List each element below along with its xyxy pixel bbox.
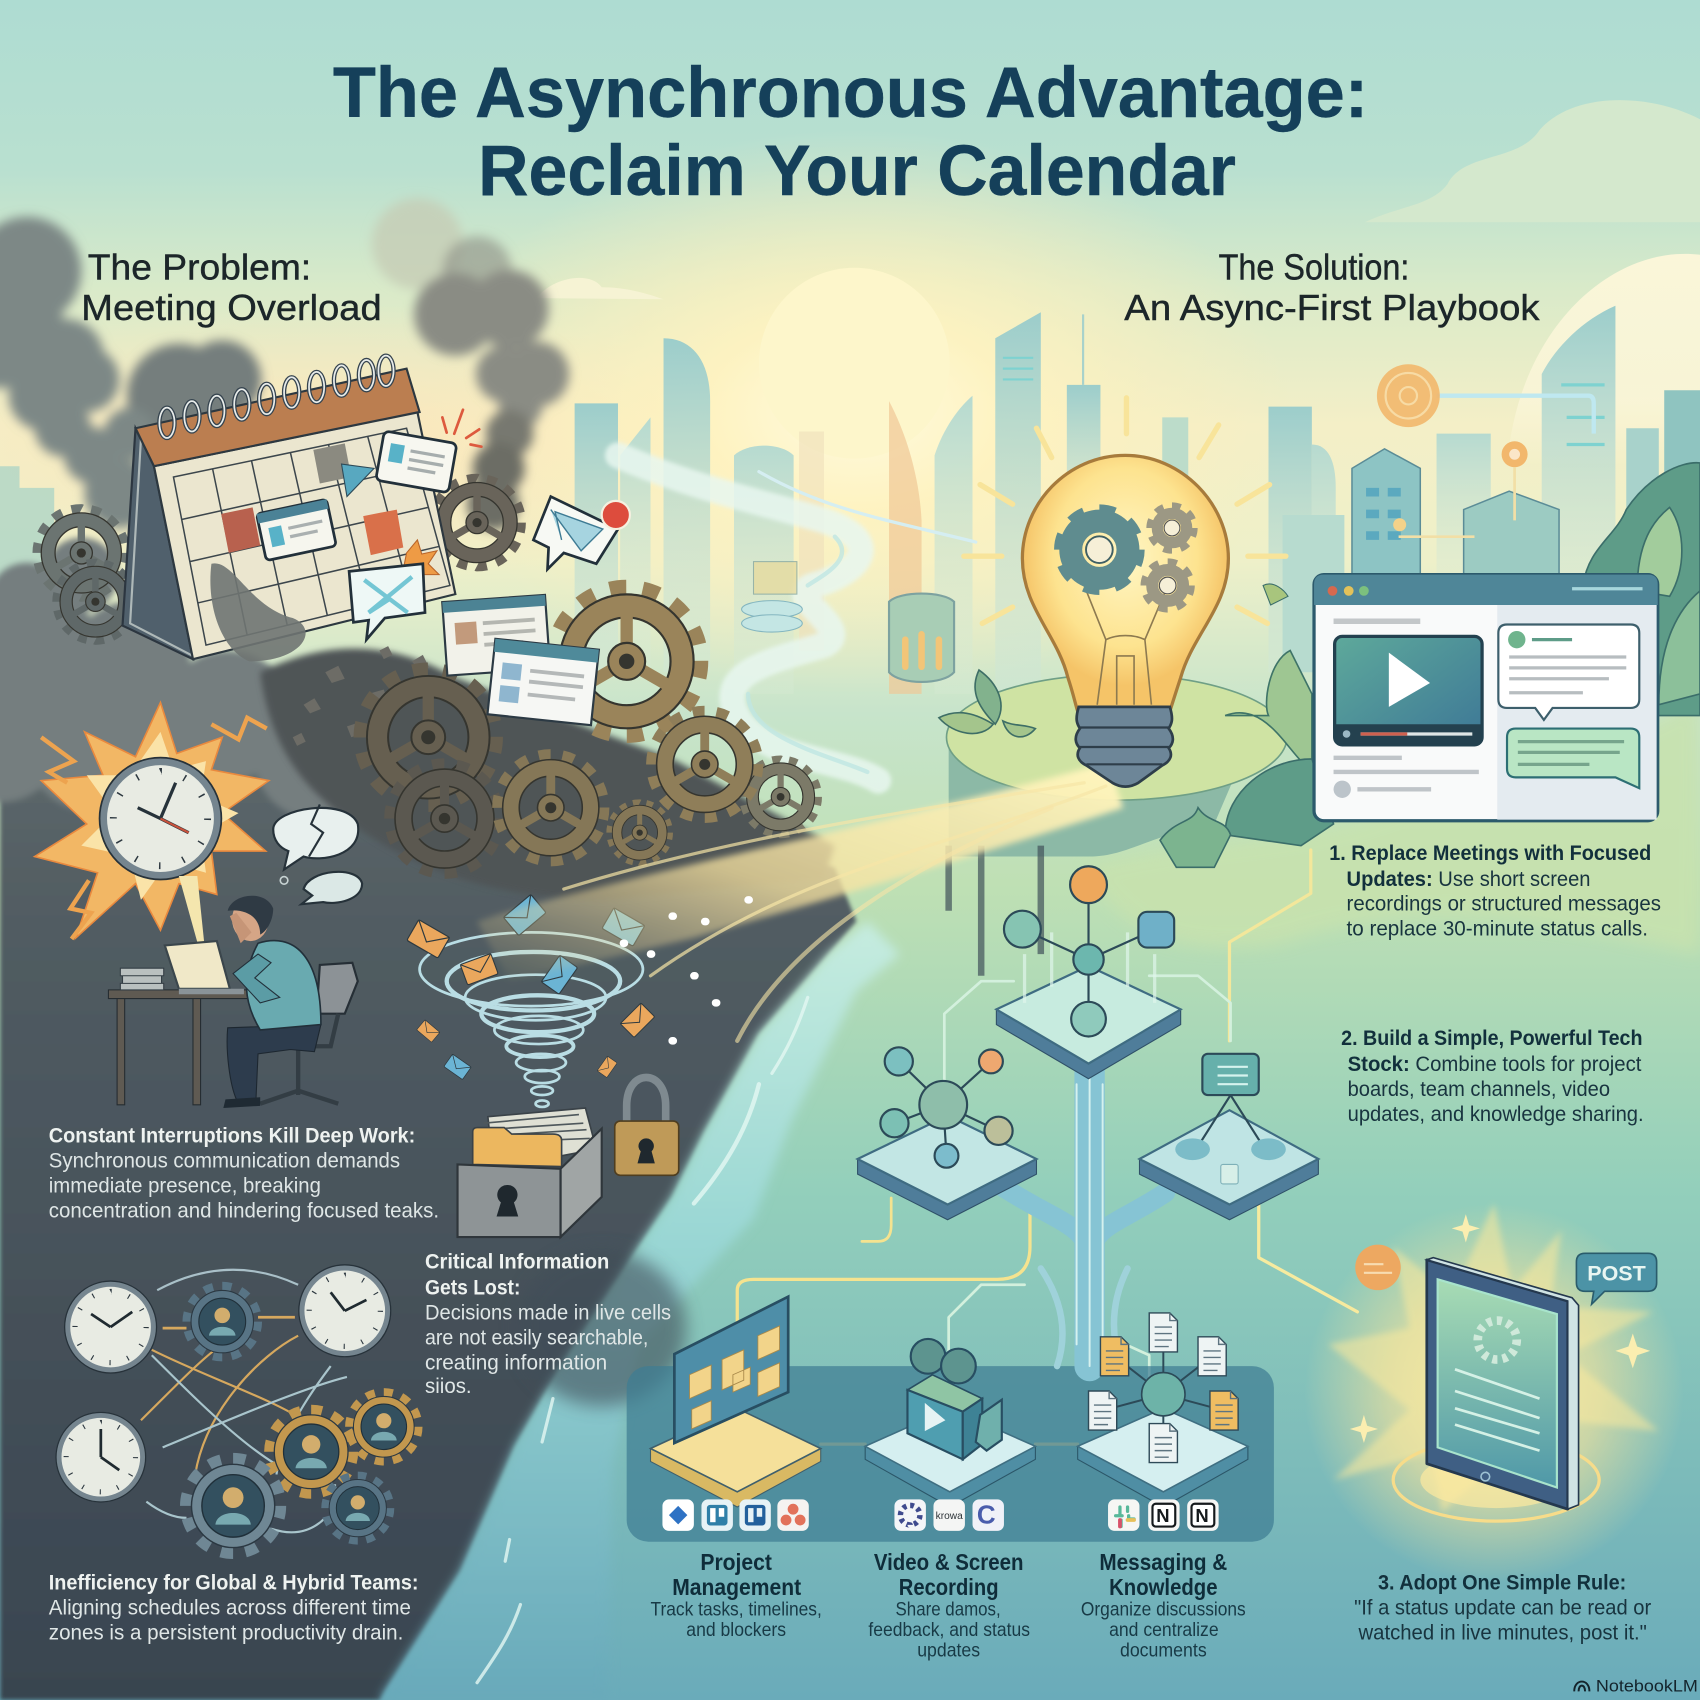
heading: the problem: The Problem: <box>88 248 311 288</box>
river highlights <box>477 997 808 1683</box>
project management tool <box>651 1297 821 1507</box>
title <box>333 53 1368 211</box>
knowledge tool logos: N <box>1195 1505 1209 1526</box>
text: step 2: Stock: Combine tools for project <box>1348 1053 1642 1076</box>
text: step 2: 2. Build a Simple, Powerful Tech <box>1341 1027 1643 1050</box>
padlock <box>615 1077 679 1175</box>
energy beam <box>477 762 1123 981</box>
text: inefficiency <box>49 1571 418 1644</box>
alarm clock <box>100 758 221 879</box>
NotebookLM watermark: NotebookLM <box>1596 1676 1698 1695</box>
video tool logos: C <box>977 1499 996 1529</box>
flying envelopes <box>407 920 450 958</box>
POST speech bubble: POST <box>1587 1260 1646 1285</box>
text: constant interruptions: Synchronous communication demands <box>49 1150 400 1173</box>
knowledge tool logos <box>1108 1499 1219 1531</box>
label: project management: and blockers <box>686 1620 786 1641</box>
left platform <box>858 1047 1036 1220</box>
text shadow blend on river edge <box>517 1250 686 1406</box>
tangled arrows <box>141 1270 347 1532</box>
right foliage <box>1160 463 1700 867</box>
text: critical information: Gets Lost: <box>425 1277 520 1300</box>
text: step 2: updates, and knowledge sharing. <box>1348 1103 1644 1126</box>
label: video and screen recording: feedback, and status <box>868 1620 1030 1641</box>
label: project management: Management <box>672 1574 802 1600</box>
text: critical information: creating information <box>425 1351 607 1374</box>
label: video and screen recording <box>868 1549 1030 1662</box>
blue shard and red sparks <box>342 410 481 588</box>
email tornado <box>407 894 655 1107</box>
text: constant interruptions <box>49 1125 439 1223</box>
envelope bubble on calendar <box>349 564 425 640</box>
label: video and screen recording: Video & Screen <box>874 1549 1023 1575</box>
people across time zones <box>56 1265 418 1553</box>
text: step 3: watched in live minutes, post it." <box>1358 1621 1647 1644</box>
calendar grid <box>173 428 450 645</box>
books <box>120 968 164 990</box>
river <box>379 922 900 1700</box>
right platform <box>1139 1054 1318 1220</box>
video recording tool <box>865 1339 1035 1507</box>
comment bubble <box>1498 624 1639 720</box>
orange signal nodes <box>1377 364 1594 537</box>
calendar marked cells <box>221 507 260 553</box>
head <box>232 898 269 941</box>
label: messaging and knowledge: documents <box>1120 1641 1207 1662</box>
laptop <box>165 941 230 989</box>
text: step 3: "If a status update can be read or <box>1354 1596 1651 1619</box>
text: critical information: siios. <box>425 1375 472 1398</box>
sparkles <box>1350 1214 1650 1443</box>
desk <box>108 990 280 1105</box>
heading: the problem: Meeting Overload <box>81 288 382 328</box>
POST speech bubble <box>1576 1253 1657 1304</box>
reply bubble <box>1507 729 1639 788</box>
chair <box>317 963 358 1014</box>
bulb rays <box>964 398 1286 623</box>
text: critical information: Critical Information <box>425 1250 609 1273</box>
text: critical information <box>425 1250 671 1398</box>
broken speech bubbles <box>273 804 362 904</box>
interruption spike <box>179 876 208 981</box>
app window mockup <box>1314 575 1658 821</box>
calendar spiral rings <box>159 356 394 438</box>
text: step 1 <box>1329 842 1661 941</box>
rubble mound <box>0 538 835 900</box>
tool panel background <box>627 1366 1274 1542</box>
text: step 3: 3. Adopt One Simple Rule: <box>1378 1571 1626 1594</box>
beam streaks <box>564 783 1106 1041</box>
glowing connector lines <box>737 850 1357 1444</box>
torso <box>246 941 321 1030</box>
heading: the solution: An Async-First Playbook <box>1124 288 1540 328</box>
smoke plumes <box>0 198 569 530</box>
calendar <box>123 356 455 661</box>
light bulb <box>1022 455 1228 787</box>
notification card <box>376 431 457 493</box>
small plant beside bulb <box>939 670 1035 737</box>
text: step 2 <box>1341 1027 1644 1126</box>
clock burst <box>35 703 269 981</box>
green hillside <box>1084 694 1700 954</box>
network tree trunk <box>1003 1068 1165 1366</box>
label: messaging and knowledge: Knowledge <box>1109 1574 1218 1600</box>
title: Reclaim Your Calendar <box>478 131 1236 211</box>
text: step 1: to replace 30-minute status calls. <box>1347 918 1648 941</box>
text: step 1: Updates: Use short screen <box>1347 868 1590 891</box>
title: The Asynchronous Advantage: <box>333 53 1368 133</box>
label: messaging and knowledge: Messaging & <box>1099 1549 1227 1575</box>
legs <box>227 1025 321 1102</box>
play icon <box>1389 653 1430 707</box>
bulb screw base <box>1076 707 1173 787</box>
small data towers <box>742 562 954 682</box>
video tool logos <box>894 1499 1004 1531</box>
text: critical information: are not easily searchable, <box>425 1326 648 1349</box>
heading: the solution <box>1124 248 1540 328</box>
stacked app windows <box>442 595 599 725</box>
notification window on calendar <box>256 499 336 561</box>
broken gears pile <box>38 479 817 872</box>
video player <box>1335 636 1482 745</box>
dark problem area <box>0 640 857 1700</box>
label: video and screen recording: Recording <box>899 1574 999 1600</box>
text: critical information: Decisions made in live cells <box>425 1301 671 1324</box>
envelope bubble with red alert <box>533 497 630 569</box>
label: video and screen recording: updates <box>917 1641 980 1662</box>
project management logos <box>662 1499 809 1531</box>
top platform <box>996 866 1181 1079</box>
locked file box <box>458 1108 602 1237</box>
text: inefficiency: Inefficiency for Global & Hybrid Teams: <box>49 1571 418 1594</box>
text: constant interruptions: immediate presence, breaking <box>49 1175 321 1198</box>
winding data stream <box>618 455 976 781</box>
text: inefficiency: Aligning schedules across different time <box>49 1596 411 1619</box>
video tool logos: krowa <box>936 1511 963 1522</box>
window control dots <box>1328 586 1369 596</box>
smoke over calendar <box>210 563 306 661</box>
bulb gears <box>1059 510 1139 590</box>
clouds <box>537 100 1700 466</box>
heading: the problem <box>81 248 382 328</box>
text: inefficiency: zones is a persistent productivity drain. <box>49 1621 403 1644</box>
stressed worker at desk <box>108 896 358 1108</box>
calendar ring highlights <box>159 356 394 438</box>
text: step 2: boards, team channels, video <box>1348 1078 1610 1101</box>
label: project management <box>651 1549 822 1641</box>
heading: the solution: The Solution: <box>1219 248 1409 288</box>
label: project management: Track tasks, timelines, <box>651 1599 822 1620</box>
sunrise glow <box>0 130 1290 694</box>
text: step 1: recordings or structured messages <box>1347 893 1661 916</box>
label: video and screen recording: Share damos, <box>896 1599 1001 1620</box>
label: messaging and knowledge: Organize discussions <box>1081 1599 1246 1620</box>
label: messaging and knowledge: and centralize <box>1109 1620 1219 1641</box>
orange status bubble <box>1355 1245 1401 1290</box>
text: constant interruptions: concentration and hindering focused teaks. <box>49 1200 439 1223</box>
text: step 1: 1. Replace Meetings with Focused <box>1329 842 1651 865</box>
floating island under bulb <box>946 674 1287 976</box>
knowledge hub tool <box>1078 1313 1248 1507</box>
city skyline <box>0 306 1700 694</box>
glowing tablet <box>1304 1203 1684 1583</box>
label: project management: Project <box>700 1549 772 1575</box>
lightning bolts <box>41 718 267 939</box>
knowledge tool logos: N <box>1156 1505 1170 1526</box>
text: constant interruptions: Constant Interruptions Kill Deep Work: <box>49 1125 415 1148</box>
tablet screen <box>1438 1279 1557 1488</box>
label: messaging and knowledge <box>1081 1549 1246 1662</box>
text: step 3 <box>1354 1571 1651 1644</box>
